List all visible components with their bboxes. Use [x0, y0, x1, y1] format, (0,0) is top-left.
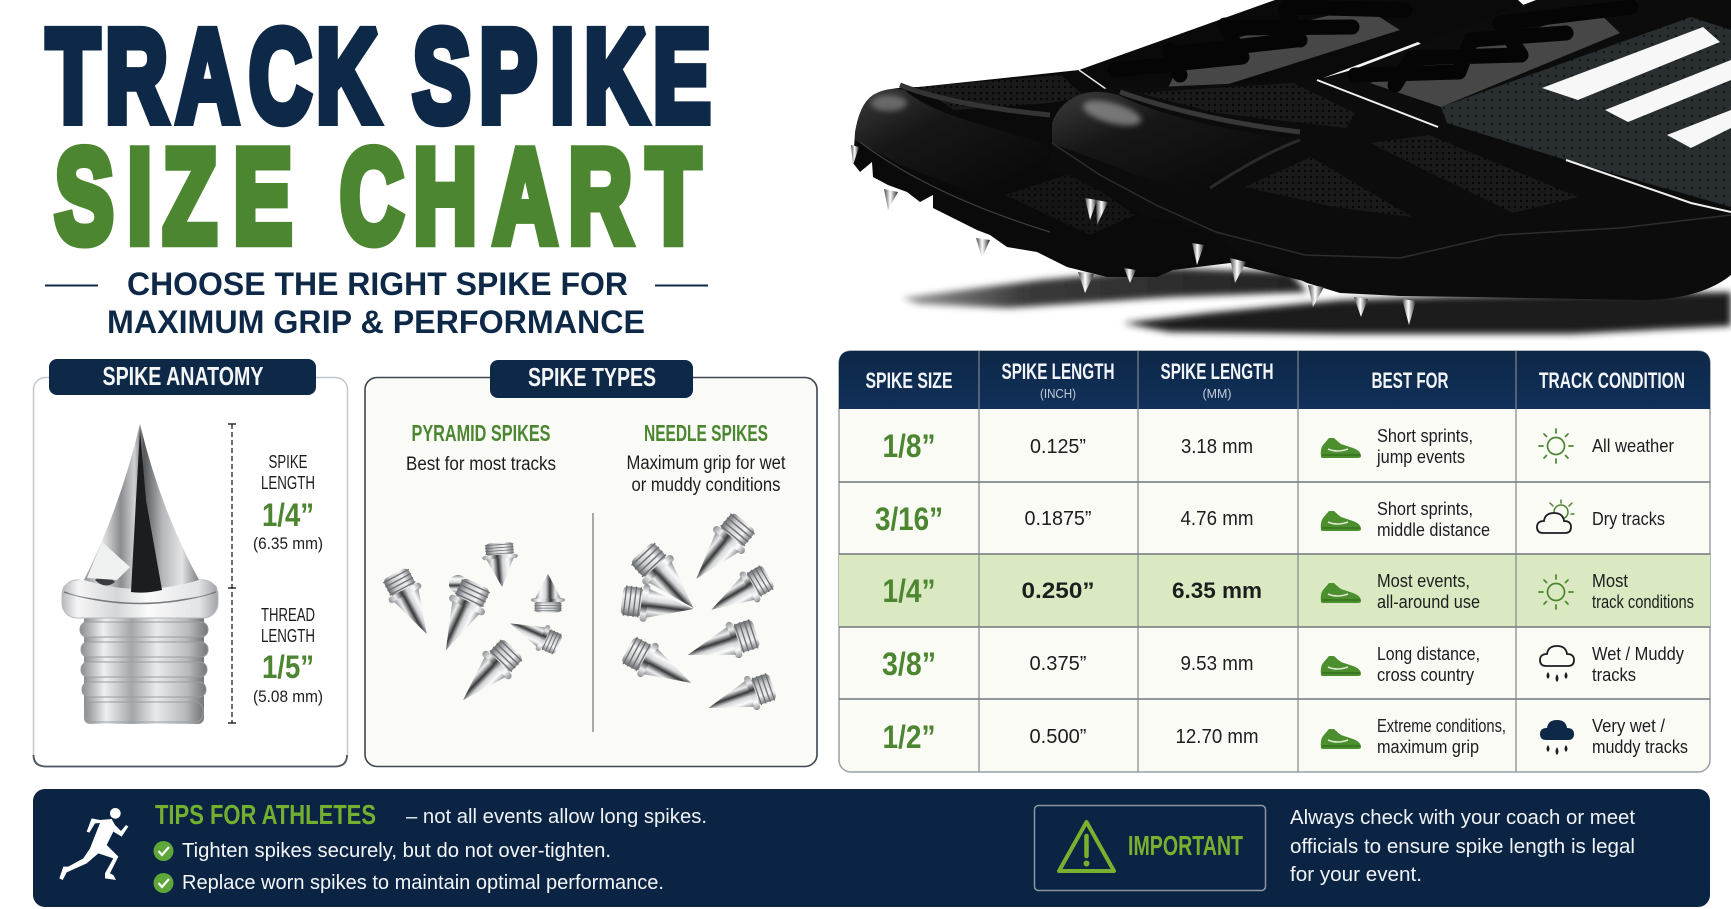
spike length label: 1/4”: [262, 497, 314, 533]
tips heading: – not all events allow long spikes.: [406, 806, 707, 828]
row: 1/8: 0.125”: [1030, 436, 1086, 458]
dimension line: [231, 424, 233, 723]
pyramid spike illustrations: [379, 542, 565, 713]
important message: Always check with your coach or meet: [1290, 806, 1635, 829]
large spike illustration: [62, 424, 218, 724]
spike length label: [253, 452, 323, 553]
row: 3/16: 3/16”: [875, 501, 943, 537]
subtitle: [45, 266, 708, 340]
row: 1/8: All weather: [1592, 435, 1674, 456]
title: TRACK SPIKE: [47, 3, 711, 149]
needle spikes label: NEEDLE SPIKES: [644, 420, 768, 446]
row: 3/8: 9.53 mm: [1180, 653, 1254, 675]
thread length label: (5.08 mm): [253, 687, 323, 706]
row: 1/2: muddy tracks: [1592, 736, 1688, 757]
row: 3/8: Long distance,: [1377, 643, 1480, 664]
table header row: SPIKE SIZE: [866, 368, 952, 393]
row: 1/2: Very wet /: [1592, 715, 1666, 736]
pyramid spikes label: PYRAMID SPIKES: [412, 420, 550, 446]
row: 1/4 highlighted: all-around use: [1377, 591, 1480, 612]
row: 1/2: [882, 715, 1688, 757]
important badge: IMPORTANT: [1128, 830, 1243, 861]
row: 1/4 highlighted: Most events,: [1377, 570, 1470, 591]
row: 1/2: 12.70 mm: [1176, 726, 1258, 748]
row: 1/4 highlighted: [882, 570, 1694, 612]
row: 1/8: 3.18 mm: [1181, 436, 1253, 458]
subtitle: CHOOSE THE RIGHT SPIKE FOR: [127, 266, 628, 302]
heading: spike anatomy: SPIKE ANATOMY: [102, 361, 264, 391]
title: SIZE CHART: [55, 122, 700, 270]
needle spikes label: Maximum grip for wet: [626, 453, 786, 474]
heading: spike types: [490, 360, 693, 398]
row: 1/2: 1/2”: [882, 719, 936, 755]
row: 1/4 highlighted: Most: [1592, 570, 1628, 591]
icon: heavy rain cloud: [1540, 720, 1574, 755]
row: 1/8: jump events: [1376, 446, 1465, 467]
hero image: track spike shoes: [851, 0, 1731, 334]
row: 1/2: Extreme conditions,: [1377, 715, 1506, 736]
pyramid spikes label: [406, 420, 556, 475]
tip: tighten spikes: Tighten spikes securely, but do not over-tighten.: [182, 840, 611, 862]
title: [47, 3, 711, 270]
panel: spike types: [365, 360, 817, 766]
icon: warning triangle: [1059, 822, 1114, 871]
highlighted row background: [839, 554, 1710, 627]
row: 3/16: [875, 498, 1665, 540]
row: 1/2: 0.500”: [1030, 726, 1086, 748]
tips heading: [155, 799, 707, 830]
important badge: [1034, 806, 1266, 890]
pyramid spikes label: Best for most tracks: [406, 454, 556, 475]
spike length label: SPIKE: [268, 452, 308, 472]
row: 3/16: middle distance: [1377, 519, 1490, 540]
thread length label: 1/5”: [262, 649, 314, 685]
row: 3/16: Dry tracks: [1592, 508, 1665, 529]
row: 3/8: tracks: [1592, 664, 1636, 685]
panel: tips and important banner: [33, 789, 1710, 907]
table header row: SPIKE LENGTH: [1160, 359, 1274, 384]
spike length label: (6.35 mm): [253, 534, 323, 553]
row: 3/16: Short sprints,: [1377, 498, 1473, 519]
row: 3/8: 0.375”: [1030, 653, 1086, 675]
table header row: BEST FOR: [1372, 368, 1449, 393]
row: 3/8: cross country: [1377, 664, 1475, 685]
row: 3/16: 4.76 mm: [1180, 508, 1254, 530]
row: 3/16: 0.1875”: [1024, 508, 1092, 530]
panel: spike anatomy: [34, 359, 348, 766]
thread length label: THREAD: [261, 605, 315, 625]
row: 1/8: Short sprints,: [1377, 425, 1473, 446]
row: 1/4 highlighted: 6.35 mm: [1172, 578, 1262, 603]
row: 1/4 highlighted: 0.250”: [1022, 578, 1094, 603]
heading: spike anatomy: [49, 359, 316, 395]
icon: runner: [59, 808, 128, 880]
front shoe: [1047, 0, 1731, 300]
table header row: (MM): [1202, 386, 1232, 401]
spike length label: LENGTH: [261, 473, 315, 493]
important message: officials to ensure spike length is legal: [1290, 835, 1635, 858]
tips heading: TIPS FOR ATHLETES: [155, 799, 376, 830]
row: 1/4 highlighted: 1/4”: [882, 573, 936, 609]
thread length label: LENGTH: [261, 626, 315, 646]
table header row: [839, 351, 1710, 409]
needle spikes label: [626, 420, 786, 496]
table header row: SPIKE LENGTH: [1002, 359, 1114, 384]
subtitle: MAXIMUM GRIP & PERFORMANCE: [107, 304, 645, 340]
tip: replace worn spikes: Replace worn spikes to maintain optimal performance.: [182, 872, 664, 894]
icon: rain cloud: [1540, 646, 1574, 682]
sole spikes: [851, 145, 1416, 325]
icon: sun and cloud: [1537, 500, 1574, 533]
row: 1/8: [882, 425, 1674, 467]
important message: for your event.: [1290, 863, 1422, 886]
table header row: (INCH): [1040, 386, 1076, 401]
row: 1/8: 1/8”: [882, 428, 936, 464]
back shoe: [853, 0, 1540, 285]
important message: [1290, 806, 1635, 886]
row: 1/2: maximum grip: [1377, 736, 1479, 757]
row: 3/8: 3/8”: [882, 646, 936, 682]
needle spike illustrations: [619, 509, 778, 725]
row: 3/8: [882, 643, 1685, 685]
row: 3/8: Wet / Muddy: [1592, 643, 1685, 664]
size chart table: [839, 351, 1710, 772]
row: 1/4 highlighted: track conditions: [1592, 591, 1694, 612]
thread length label: [253, 605, 323, 706]
heading: spike types: SPIKE TYPES: [528, 362, 656, 392]
needle spikes label: or muddy conditions: [632, 475, 780, 496]
